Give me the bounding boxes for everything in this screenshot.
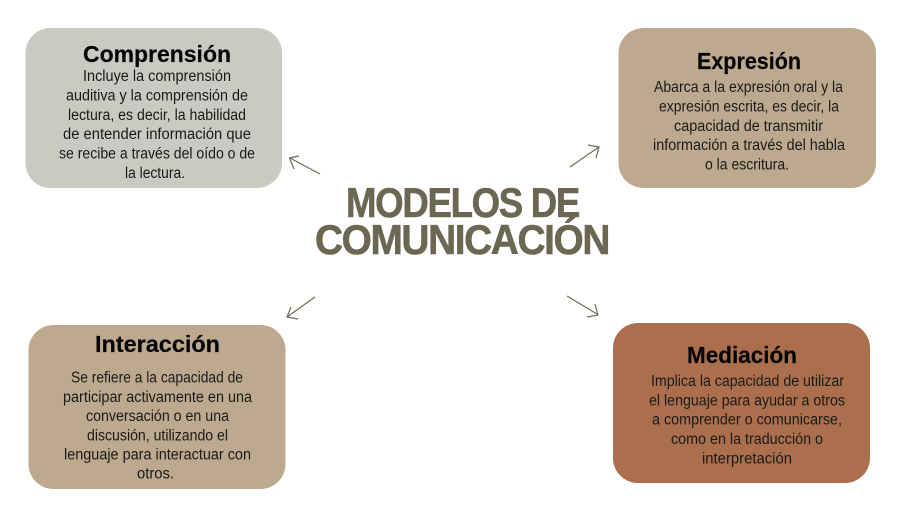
- text block: Mediación description: interpretación: [702, 450, 792, 468]
- heading: Interacción: Interacción: [95, 331, 220, 357]
- text block: Comprensión description: auditiva y la comprensión de: [66, 88, 248, 104]
- text block: Expresión description: o la escritura.: [705, 156, 789, 174]
- panel: Mediación: [613, 323, 870, 483]
- text block: Expresión description: capacidad de transmitir: [674, 118, 823, 135]
- text block: Mediación description: Implica la capacidad de utilizar: [651, 373, 844, 390]
- text block: Comprensión description: [59, 68, 255, 182]
- arrow: to Comprensión: [290, 156, 320, 174]
- text block: Expresión description: información a través del habla: [653, 137, 845, 154]
- text block: Mediación description: [649, 373, 845, 468]
- text block: Comprensión description: Incluye la comprensión: [83, 68, 231, 85]
- text block: Mediación description: el lenguaje para ayudar a otros: [649, 392, 845, 410]
- text block: Mediación description: como en la traducción o: [671, 431, 823, 448]
- panel: Expresión: [618, 28, 876, 188]
- heading: Comprensión: Comprensión: [83, 41, 231, 67]
- text block: Mediación description: a comprender o comunicarse,: [652, 412, 842, 428]
- panel: Interacción: [28, 325, 286, 489]
- arrow: to Mediación: [567, 296, 598, 317]
- text block: Interacción description: Se refiere a la capacidad de: [71, 370, 243, 386]
- text block: Interacción description: lenguaje para interactuar con: [64, 446, 251, 464]
- title: COMUNICACIÓN: [315, 215, 609, 263]
- heading: Expresión: Expresión: [697, 48, 801, 74]
- text block: Comprensión description: lectura, es decir, la habilidad: [68, 107, 246, 124]
- arrow: to Expresión: [570, 145, 599, 167]
- text block: Expresión description: expresión escrita, es decir, la: [659, 98, 839, 116]
- title: [315, 179, 609, 263]
- arrow: to Interacción: [287, 297, 315, 319]
- text block: Interacción description: [63, 370, 252, 482]
- text block: Interacción description: discusión, utilizando el: [87, 428, 228, 444]
- text block: Expresión description: [653, 79, 845, 174]
- text block: Interacción description: participar activamente en una: [63, 389, 252, 406]
- text block: Expresión description: Abarca a la expresión oral y la: [654, 79, 843, 96]
- title: MODELOS DE: [346, 179, 579, 226]
- text block: Comprensión description: la lectura.: [125, 165, 185, 182]
- text block: Interacción description: conversación o en una: [86, 408, 229, 425]
- text block: Comprensión description: se recibe a través del oído o de: [59, 146, 255, 162]
- text block: Interacción description: otros.: [137, 466, 174, 482]
- text block: Comprensión description: de entender información que: [63, 126, 251, 143]
- panel: Comprensión: [26, 28, 282, 188]
- heading: Mediación: Mediación: [687, 342, 797, 368]
